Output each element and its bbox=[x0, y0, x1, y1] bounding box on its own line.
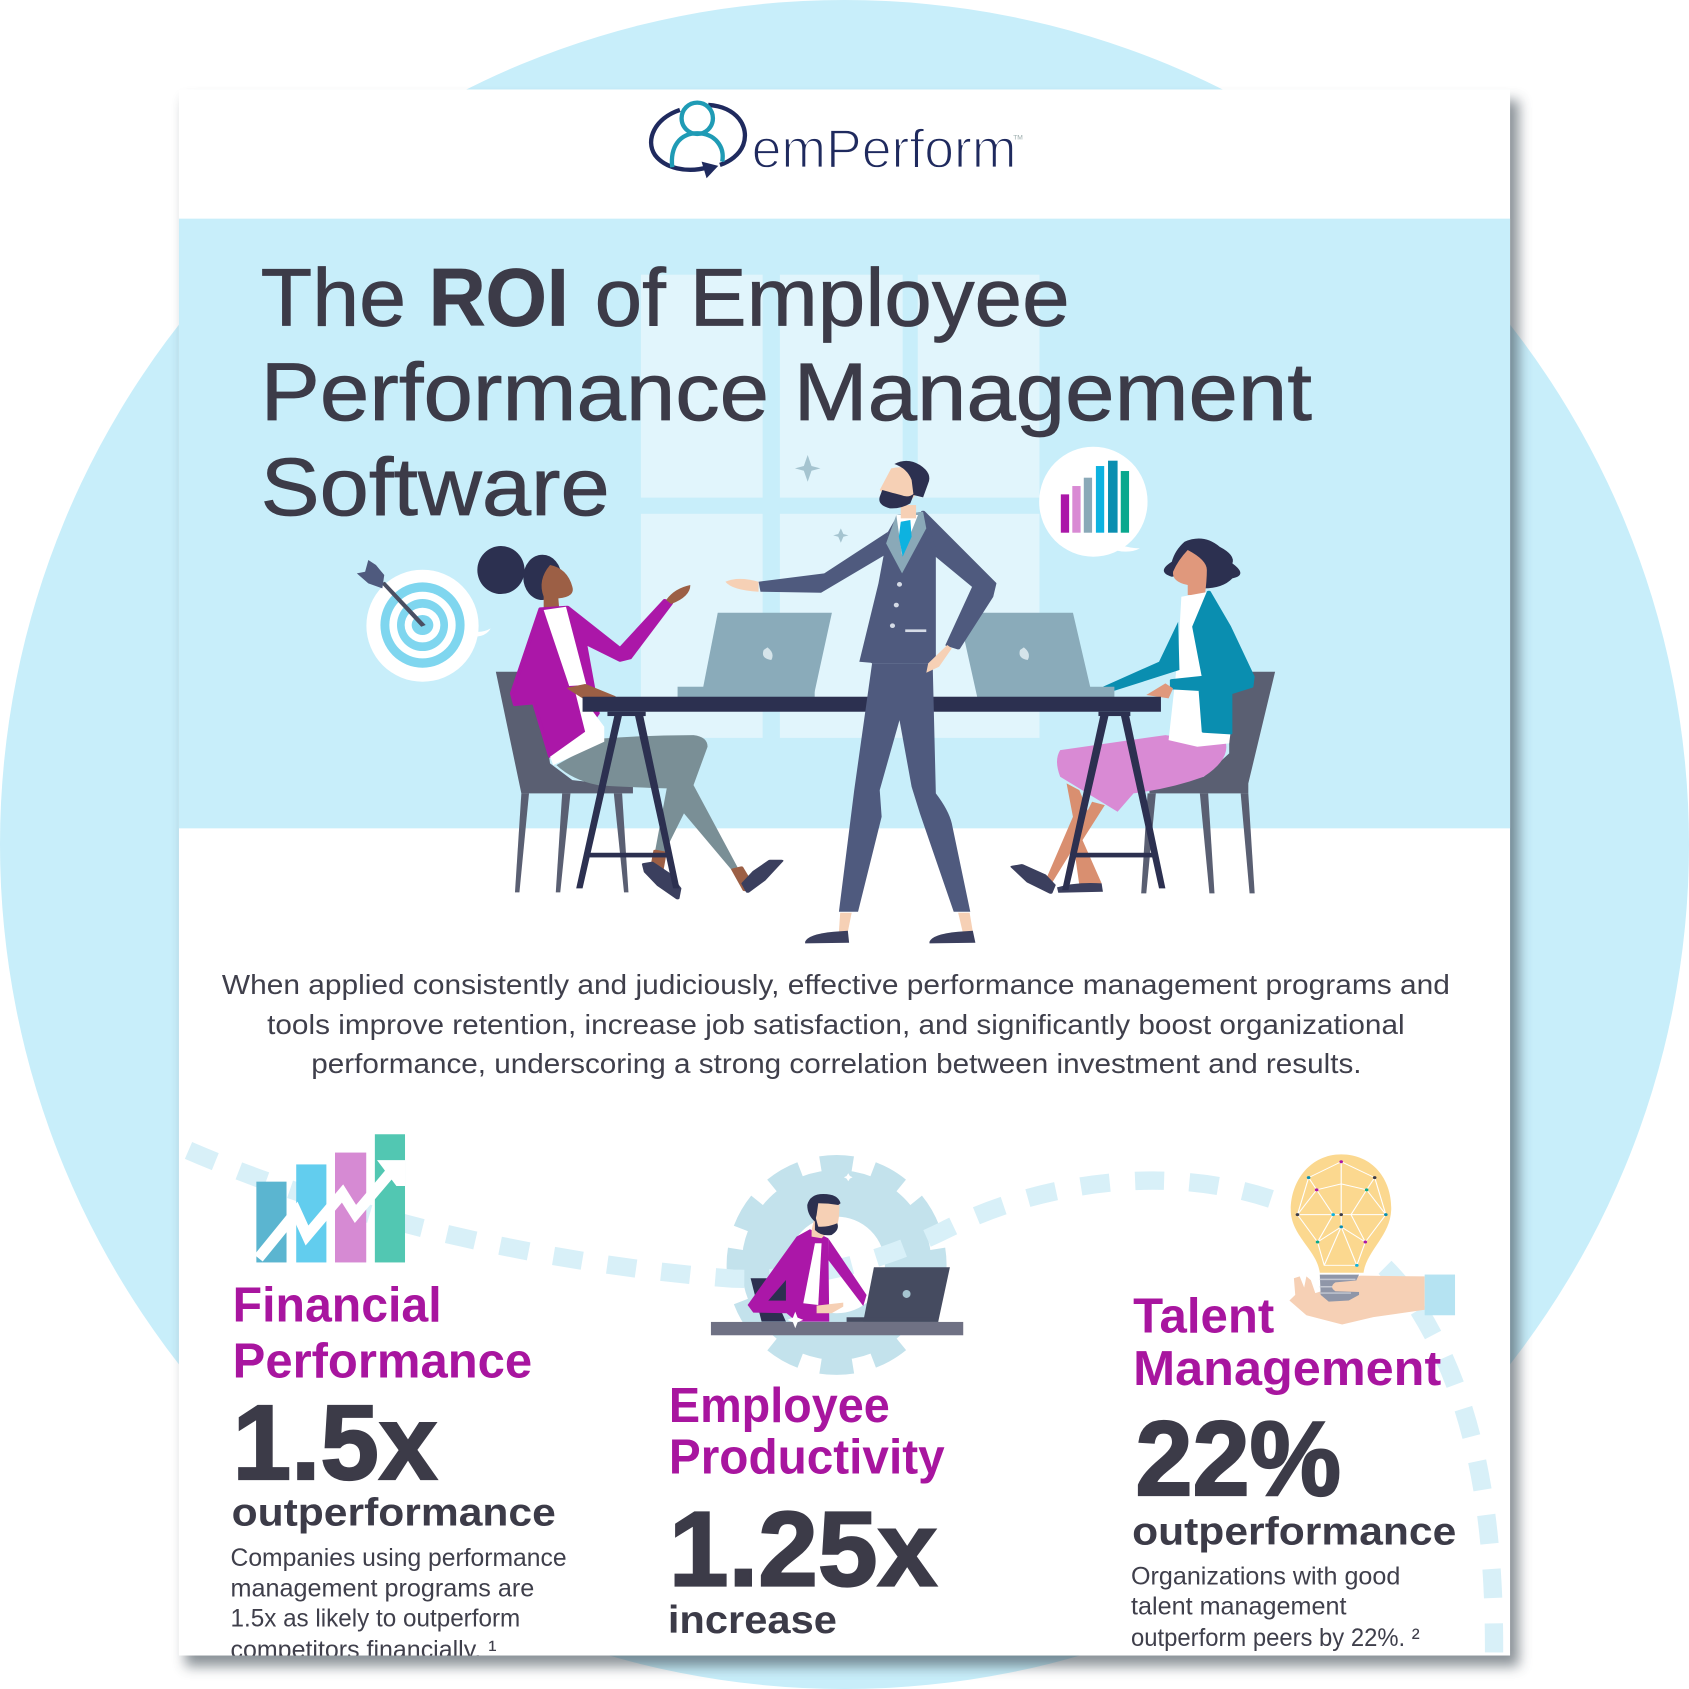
logo: emPerform bbox=[752, 117, 1017, 179]
intro paragraph: performance, underscoring a strong correlation between investment and results. bbox=[311, 1048, 1362, 1079]
chair right bbox=[1141, 672, 1275, 893]
woman right bbox=[1012, 538, 1253, 893]
heading: Management bbox=[1133, 1341, 1441, 1396]
description: Organizations with good bbox=[1131, 1564, 1400, 1591]
icon: bar chart with arrow bbox=[256, 1134, 405, 1262]
icon: person at laptop bbox=[711, 1194, 963, 1335]
heading: Employee bbox=[669, 1378, 890, 1433]
description bbox=[1131, 1564, 1420, 1652]
table bbox=[576, 697, 1165, 890]
label: increase bbox=[668, 1599, 837, 1642]
heading bbox=[672, 1386, 944, 1484]
hero band bbox=[179, 219, 1510, 828]
intro paragraph: When applied consistently and judiciously, effective performance management programs and bbox=[222, 969, 1450, 1000]
page shadow bbox=[185, 100, 1519, 1666]
number: 22% bbox=[1135, 1400, 1341, 1518]
description: Companies using performance bbox=[231, 1545, 567, 1572]
logo bbox=[651, 103, 1023, 179]
title: The bbox=[261, 252, 406, 343]
description: management programs are bbox=[231, 1575, 534, 1602]
intro paragraph bbox=[222, 969, 1450, 1079]
icon: sparkles bbox=[795, 455, 848, 543]
description: outperform peers by 22%. ² bbox=[1131, 1625, 1420, 1652]
description: competitors financially. ¹ bbox=[231, 1637, 497, 1664]
number: 1.5x bbox=[233, 1384, 437, 1502]
intro paragraph: tools improve retention, increase job satisfaction, and significantly boost organizational bbox=[267, 1009, 1405, 1040]
label: outperformance bbox=[1132, 1511, 1456, 1554]
heading: Productivity bbox=[669, 1430, 945, 1485]
stat: financial performance bbox=[231, 1278, 567, 1664]
dashed path bbox=[189, 1150, 1494, 1656]
window bbox=[641, 275, 1039, 738]
description: 1.5x as likely to outperform bbox=[231, 1606, 520, 1633]
heading bbox=[236, 1286, 530, 1378]
logo: TM bbox=[1013, 134, 1023, 141]
description bbox=[231, 1545, 567, 1664]
stat: employee productivity bbox=[668, 1378, 945, 1642]
title: of Employee bbox=[595, 252, 1070, 343]
icon: gear bbox=[735, 1163, 938, 1367]
title: ROI bbox=[429, 252, 569, 343]
stat: talent management bbox=[1131, 1288, 1456, 1652]
title: Performance Management bbox=[261, 347, 1312, 438]
woman left bbox=[477, 546, 782, 898]
icon: speech bubble bar chart bbox=[1039, 447, 1148, 557]
page panel bbox=[179, 89, 1510, 1664]
description: talent management bbox=[1131, 1594, 1347, 1621]
heading bbox=[1133, 1288, 1441, 1396]
laptops bbox=[678, 613, 1114, 697]
heading: Talent bbox=[1133, 1288, 1274, 1343]
heading: Performance bbox=[233, 1334, 532, 1389]
man standing bbox=[725, 461, 995, 943]
number: 1.25x bbox=[669, 1491, 937, 1609]
heading: Financial bbox=[233, 1278, 442, 1333]
hero illustration bbox=[357, 447, 1275, 943]
icon: target bbox=[357, 560, 491, 682]
title bbox=[262, 266, 1312, 516]
icon: light bulb in hand bbox=[1289, 1154, 1455, 1325]
title: Software bbox=[261, 442, 610, 533]
chair left bbox=[496, 672, 633, 892]
label: outperformance bbox=[232, 1491, 556, 1534]
